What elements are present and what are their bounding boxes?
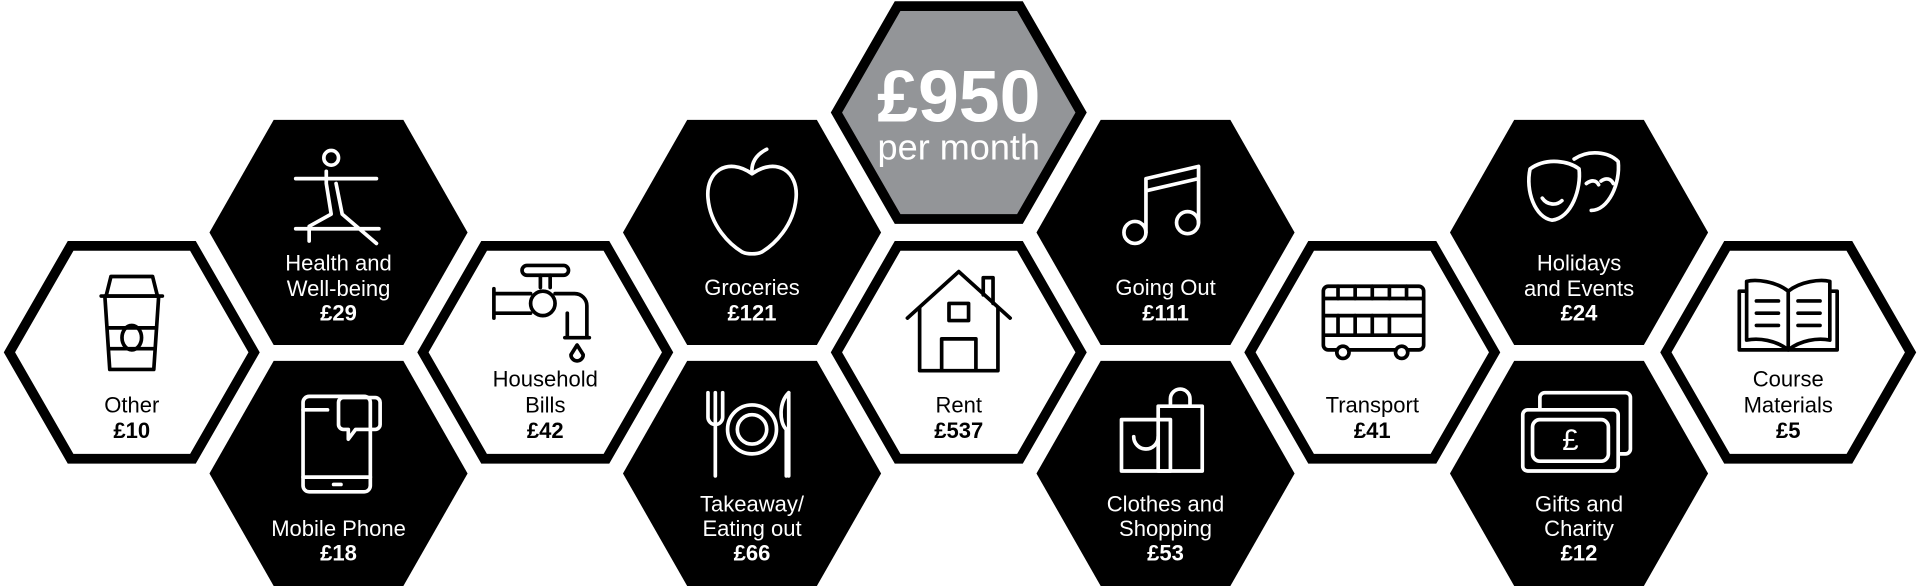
hex: course materials xyxy=(1666,246,1911,459)
icon: banknotes xyxy=(1523,393,1630,471)
hex: takeaway: £66 xyxy=(734,540,770,565)
hex: household bills: Bills xyxy=(525,392,565,417)
hex: rent: Rent xyxy=(936,392,982,417)
hex: clothes: Clothes and xyxy=(1107,492,1224,517)
hex: groceries: £121 xyxy=(728,301,777,326)
icon: banknotes: £ xyxy=(1562,424,1579,457)
hex: holidays: £24 xyxy=(1561,301,1598,326)
hex: takeaway: Takeaway/ xyxy=(700,492,805,517)
hex: clothes xyxy=(1036,361,1295,586)
icon: apple xyxy=(708,149,796,254)
hex: groceries: Groceries xyxy=(704,275,800,300)
hex: takeaway xyxy=(623,361,881,586)
hex: going out: Going Out xyxy=(1115,275,1216,300)
hex: total: £950 xyxy=(877,56,1040,138)
icon: house xyxy=(907,272,1010,371)
hex: health: Well-being xyxy=(287,276,390,301)
hex: gifts: Charity xyxy=(1544,516,1614,541)
hex: clothes: Shopping xyxy=(1119,516,1212,541)
hex: takeaway: Eating out xyxy=(702,516,802,541)
icon: tap xyxy=(494,265,589,361)
hex: holidays xyxy=(1450,120,1708,345)
hex: mobile xyxy=(209,361,468,586)
hex: gifts xyxy=(1450,361,1708,586)
hex: household bills: Household xyxy=(493,367,598,392)
hex: household bills xyxy=(423,246,668,459)
icon: music note xyxy=(1124,166,1199,243)
hex: course materials: £5 xyxy=(1776,418,1800,443)
hex: course materials: Course xyxy=(1753,367,1824,392)
hex: mobile: Mobile Phone xyxy=(271,516,406,541)
hex: rent: £537 xyxy=(934,418,983,443)
hex: holidays: and Events xyxy=(1524,276,1634,301)
hex: other: £10 xyxy=(113,418,150,443)
hex: gifts: Gifts and xyxy=(1535,492,1623,517)
hex: total xyxy=(836,6,1081,219)
hex: mobile: £18 xyxy=(320,540,357,565)
hex: health xyxy=(209,120,468,345)
icon: yoga figure xyxy=(296,150,379,243)
hex: going out xyxy=(1036,120,1295,345)
hex: rent xyxy=(836,246,1081,459)
icon: coffee cup xyxy=(101,276,162,369)
hex: other: Other xyxy=(104,392,159,417)
hex: other xyxy=(9,246,254,459)
hex: holidays: Holidays xyxy=(1537,251,1621,276)
icon: plate and cutlery xyxy=(708,393,789,476)
hex: clothes: £53 xyxy=(1147,540,1184,565)
hex: household bills: £42 xyxy=(527,418,564,443)
icon: bus xyxy=(1323,286,1424,358)
hex: transport: £41 xyxy=(1354,418,1391,443)
hex: groceries xyxy=(623,120,881,345)
hex: health: Health and xyxy=(285,251,392,276)
hex: health: £29 xyxy=(320,301,357,326)
hex: transport: Transport xyxy=(1326,392,1419,417)
icon: open book xyxy=(1739,280,1837,350)
icon: shopping bags xyxy=(1121,389,1202,471)
hex: gifts: £12 xyxy=(1561,540,1597,565)
hex: course materials: Materials xyxy=(1744,392,1833,417)
hex: transport xyxy=(1250,246,1495,459)
icon: phone xyxy=(303,396,380,492)
hex: going out: £111 xyxy=(1142,301,1189,326)
hex: total: per month xyxy=(878,126,1040,167)
icon: theatre masks xyxy=(1529,153,1618,220)
